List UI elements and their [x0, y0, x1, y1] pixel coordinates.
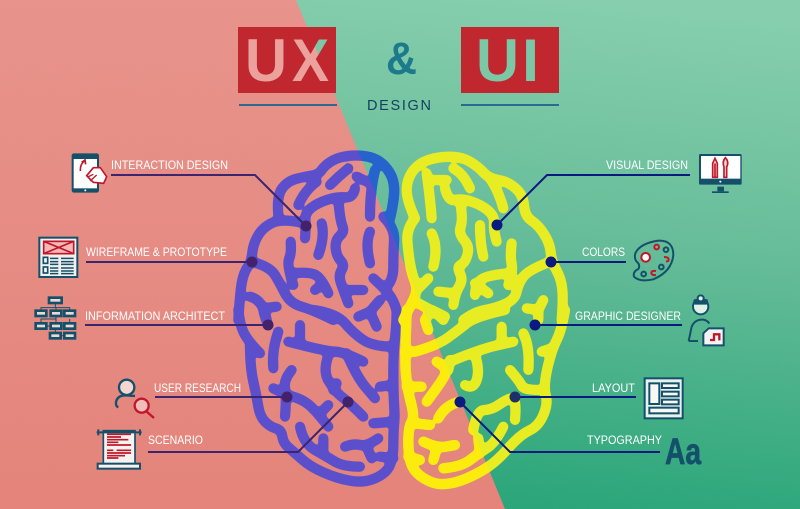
UX badge: [238, 27, 336, 94]
callout: interaction design: [72, 153, 312, 232]
node: [282, 392, 292, 402]
icon: user with magnifier: [116, 380, 154, 418]
icon: paint palette: [634, 241, 673, 280]
brain: left hemisphere over green: [358, 150, 400, 250]
UI badge: U: [476, 27, 519, 94]
label: VISUAL DESIGN: [606, 158, 688, 172]
node: [546, 256, 556, 268]
label: USER RESEARCH: [154, 381, 241, 395]
background: coral wedge: [0, 0, 505, 509]
callout: layout: [510, 378, 683, 418]
callout: visual design: [492, 154, 742, 230]
leader line: [111, 175, 306, 226]
callout: scenario: [97, 396, 353, 469]
icon: Aa glyphs: Aa: [665, 431, 701, 472]
label: SCENARIO: [148, 433, 203, 447]
leader line: [148, 402, 348, 452]
leader line: [460, 402, 660, 452]
UX underline: [239, 104, 337, 106]
callout: graphic designer: [530, 295, 724, 345]
label: WIREFRAME & PROTOTYPE: [86, 245, 227, 259]
node: [262, 320, 274, 330]
callout: information architect: [36, 298, 273, 338]
label: GRAPHIC DESIGNER: [575, 309, 681, 323]
callout: user research: [116, 380, 292, 418]
brain: right hemisphere over coral: [398, 266, 490, 490]
callout: wireframe and prototype: [39, 238, 258, 277]
leader line: [86, 261, 252, 263]
brain: left hemisphere: [238, 156, 398, 482]
UI badge: [461, 27, 559, 94]
node: [300, 220, 312, 232]
label: LAYOUT: [592, 381, 636, 395]
node: [530, 320, 540, 330]
ampersand: &: [386, 33, 417, 84]
node: [342, 396, 354, 408]
label: INFORMATION ARCHITECT: [85, 309, 226, 323]
icon: wireframe sheet: [39, 238, 77, 277]
callout: colors: [546, 241, 673, 280]
icon: page layout: [645, 378, 683, 418]
node: [246, 256, 258, 268]
node: [454, 396, 466, 408]
UI underline: [461, 104, 559, 106]
leader line: [515, 396, 636, 398]
leader line: [535, 324, 682, 326]
design subtitle: DESIGN: [367, 98, 431, 114]
node: [492, 220, 502, 230]
title: UX and UI design header: [238, 27, 559, 114]
icon: tablet with touch hand: [72, 153, 107, 193]
leader line: [497, 175, 690, 225]
brain: right hemisphere: [403, 157, 565, 484]
UI badge: I: [522, 27, 539, 94]
leader line: [85, 324, 268, 326]
label: INTERACTION DESIGN: [111, 158, 228, 172]
icon: designer with document: [689, 295, 724, 345]
callout: typography: [454, 396, 701, 472]
node: [510, 392, 520, 402]
icon: monitor with pencil and brush: [699, 154, 742, 193]
icon: site map: [36, 298, 75, 338]
label: TYPOGRAPHY: [587, 433, 662, 447]
label: COLORS: [582, 245, 625, 259]
UX badge: X: [292, 27, 329, 94]
icon: script scroll: [97, 429, 142, 469]
leader line: [155, 396, 287, 398]
UX badge: U: [245, 27, 287, 94]
leader line: [551, 261, 626, 263]
UX badge: X: [292, 27, 329, 94]
